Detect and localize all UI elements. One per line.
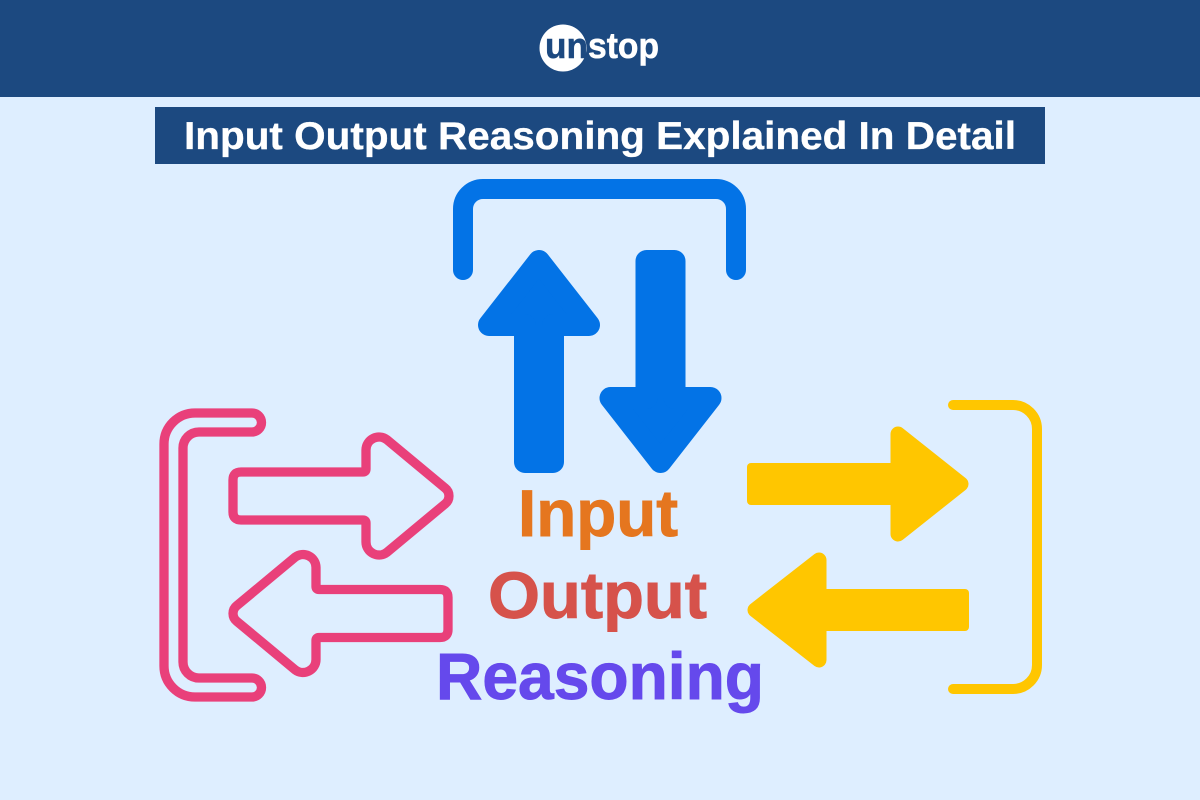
word: Input: Input (518, 476, 678, 550)
central words (436, 476, 764, 713)
icon: yellow arrows with bracket (747, 405, 1037, 689)
blue down arrow (610, 261, 710, 462)
word: Reasoning: Reasoning (436, 639, 764, 713)
logo: unstop: stop (588, 25, 659, 66)
yellow left arrow (755, 560, 969, 660)
blue bracket (463, 189, 736, 270)
logo: unstop: un (545, 25, 588, 66)
yellow right arrow (747, 434, 961, 534)
icon: blue up and down arrows with bracket (463, 189, 736, 462)
title banner (155, 107, 1045, 164)
word: Output: Output (488, 558, 707, 632)
pink right arrow (233, 437, 449, 555)
title banner: Input Output Reasoning Explained In Detail (184, 115, 1016, 158)
pink left arrow (233, 555, 448, 672)
blue up arrow (489, 261, 589, 462)
pink double bracket (164, 413, 262, 697)
yellow bracket (953, 405, 1037, 689)
header band with logo (0, 0, 1200, 97)
icon: pink outlined arrows with bracket (164, 413, 449, 697)
logo: unstop (540, 24, 659, 72)
